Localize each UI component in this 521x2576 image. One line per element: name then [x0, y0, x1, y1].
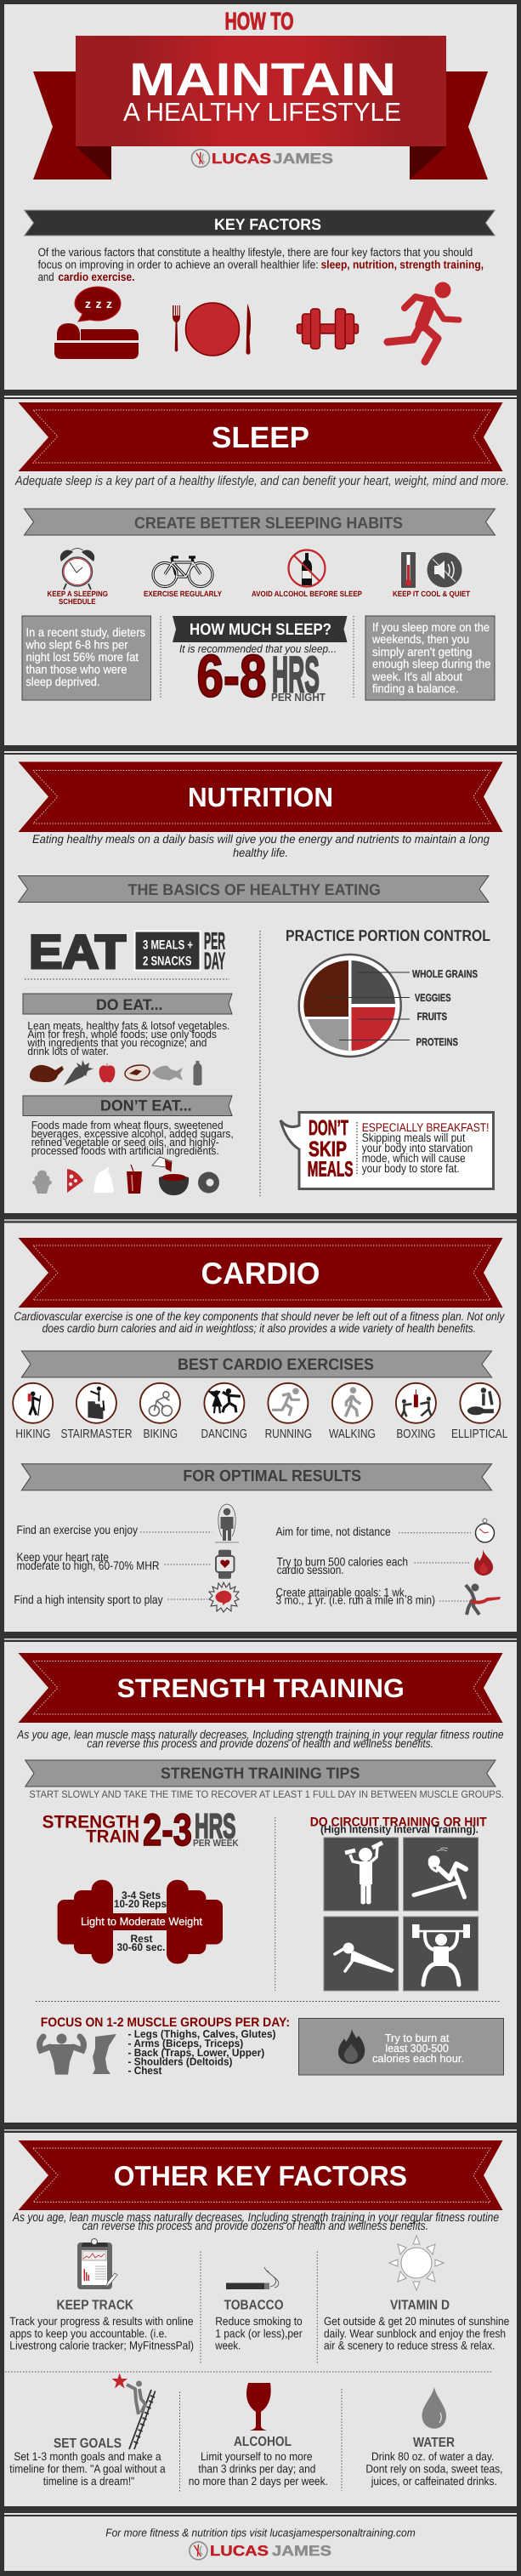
portion plate chart — [299, 955, 478, 1057]
label: keep a sleeping schedule — [48, 590, 108, 606]
callout: study: who slept 6-8 hrs per — [25, 638, 128, 652]
callout: burn calories: least 300-500 — [386, 2042, 449, 2055]
stat: strength train 2-3 hrs: TRAIN — [86, 1827, 139, 1847]
icon: thermometer — [401, 552, 416, 588]
do eat text — [26, 1019, 229, 1057]
factor: water: Dont rely on soda, sweet teas, — [365, 2463, 503, 2476]
icon: dumbbell — [297, 309, 359, 349]
callout: weekends: week. It's all about — [371, 670, 462, 683]
icon: goal climber — [112, 2374, 156, 2449]
factor: keep track: KEEP TRACK — [56, 2299, 133, 2312]
factor: set goals — [9, 2436, 166, 2488]
factor: water: Drink 80 oz. of water a day. — [371, 2450, 494, 2463]
tip: attainable goals: 3 mo., 1 yr. (i.e. run a mile in 8 min) — [275, 1593, 435, 1607]
tip: time not distance — [275, 1519, 495, 1542]
icon: walking — [332, 1383, 372, 1423]
factor: alcohol: no more than 2 days per week. — [189, 2475, 328, 2488]
panel: cardio — [4, 1223, 517, 1632]
callout: don't skip meals: DON’T — [309, 1116, 348, 1140]
don't eat ribbon: DON’T EAT... — [100, 1097, 192, 1114]
factor: set goals: timeline is a dream!" — [43, 2475, 134, 2488]
panel: nutrition — [4, 755, 517, 1213]
intro text — [38, 246, 484, 283]
don't eat text: Foods made from wheat flours, sweetened — [31, 1119, 224, 1131]
heading: circuit training: (High Intensity Interval Training). — [320, 1824, 479, 1836]
icon: incline sit-up — [404, 1838, 479, 1911]
muscle group list: - Chest — [127, 2065, 162, 2077]
icon: dancing — [204, 1383, 244, 1423]
icon: muscle torso and leg — [40, 2033, 116, 2075]
intro text: can reverse this process and provide dozens of health and wellness benefits. — [87, 1736, 433, 1750]
callout: don't skip meals: Skipping meals will put — [362, 1131, 465, 1144]
panel: footer — [4, 2516, 517, 2571]
label: keep it cool and quiet: KEEP IT COOL & QUIET — [393, 590, 470, 598]
callout: weekends — [365, 616, 495, 700]
do eat ribbon: DO EAT... — [96, 996, 163, 1013]
eat headline: 2 SNACKS — [143, 955, 192, 968]
icon: sleeping in bed: z z z — [85, 297, 112, 311]
icons: unhealthy foods — [32, 1157, 219, 1195]
subheading ribbon: THE BASICS OF HEALTHY EATING — [127, 881, 381, 898]
intro text: and — [38, 271, 54, 283]
how much sleep panel: PER NIGHT — [271, 691, 326, 704]
icon: boxing — [396, 1383, 436, 1423]
subheading ribbon — [21, 1351, 492, 1377]
icon: runner — [388, 282, 459, 362]
label: biking: BIKING — [143, 1428, 178, 1441]
factor: alcohol: than 3 drinks per day; and — [198, 2463, 315, 2476]
factor: vitamin d: air & scenery to reduce stress & relax. — [324, 2339, 495, 2352]
panel: nutrition: PER — [204, 927, 225, 955]
label: veggies: VEGGIES — [415, 992, 450, 1004]
icon: stairmaster — [76, 1383, 116, 1423]
callout: don't skip meals: your body to store fat. — [362, 1161, 460, 1175]
icon: wine glass — [246, 2383, 271, 2431]
tip: burn calories: Try to burn 500 calories each — [277, 1555, 408, 1569]
heading: circuit training: DO CIRCUIT TRAINING OR HIIT — [310, 1815, 487, 1830]
label: walking: WALKING — [329, 1428, 376, 1441]
do eat text: Lean meats, healthy fats & lotsof vegetables. — [27, 1019, 229, 1032]
logo: lucas james: JAMES — [273, 151, 333, 167]
muscle group list: - Back (Traps, Lower, Upper) — [127, 2047, 264, 2059]
don't eat text: beverages, excessive alcohol, added sugars, — [31, 1127, 234, 1140]
eat headline: EAT — [29, 925, 126, 978]
icon: plate and cutlery — [173, 303, 251, 356]
banner: other key factors: OTHER KEY FACTORS — [114, 2160, 407, 2191]
intro text — [16, 1728, 504, 1750]
do eat text: Aim for fresh, whole foods; use only foods — [27, 1028, 217, 1040]
how much sleep panel — [173, 616, 347, 710]
icon: muted speaker — [427, 553, 462, 587]
callout: study: sleep deprived. — [25, 675, 100, 688]
dumbbell diagram: 3-4 Sets — [122, 1889, 161, 1901]
do eat text: drink lots of water. — [27, 1045, 109, 1057]
factor: keep track: apps to keep you accountable. (i.e. — [9, 2328, 167, 2339]
icon: clipboard — [77, 2239, 117, 2289]
stat: strength train 2-3 hrs: 2-3 — [143, 1805, 192, 1855]
callout: study: night lost 56% more fat — [25, 650, 139, 664]
tip: attainable goals — [275, 1584, 501, 1615]
dumbbell diagram: Rest — [131, 1933, 153, 1945]
icon: sleeping in bed — [54, 287, 139, 359]
factor: keep track — [9, 2299, 194, 2352]
panel: other key factors — [4, 2133, 517, 2506]
muscle group list: - Legs (Thighs, Calves, Glutes) — [127, 2028, 275, 2040]
title: maintain: MAINTAIN — [129, 54, 396, 105]
logo: lucas james — [192, 150, 333, 167]
callout: weekends: weekends, then you — [371, 632, 469, 646]
icon: dumbbell press — [324, 1838, 399, 1911]
muscle group list: - Shoulders (Deltoids) — [127, 2055, 233, 2067]
banner: strength training — [19, 1653, 503, 1723]
don't eat ribbon — [23, 1096, 232, 1116]
factor: water — [365, 2436, 503, 2488]
icon: no alcohol — [289, 550, 325, 587]
logo: lucas james: JAMES — [272, 2543, 331, 2559]
factor: tobacco: week. — [214, 2339, 241, 2352]
dumbbell diagram: 10-20 Reps — [114, 1898, 167, 1910]
how much sleep panel: It is recommended that you sleep... — [179, 642, 337, 655]
intro text — [32, 832, 490, 859]
dumbbell diagram: Light to Moderate Weight — [81, 1915, 202, 1928]
label: fruits: FRUITS — [417, 1011, 447, 1023]
tip: heart rate — [17, 1550, 235, 1579]
tip: exercise you enjoy — [17, 1504, 239, 1542]
subheading ribbon — [21, 1464, 492, 1490]
icon: biking — [140, 1383, 180, 1423]
intro text — [12, 2211, 499, 2233]
how much sleep panel: HOW MUCH SLEEP? — [190, 621, 331, 639]
banner: sleep — [19, 402, 503, 471]
icons: healthy foods — [30, 1060, 202, 1086]
heading: portion control: PRACTICE PORTION CONTROL — [286, 926, 490, 944]
stat: strength train 2-3 hrs — [42, 1805, 239, 1855]
label: whole grains: WHOLE GRAINS — [412, 968, 478, 980]
factor: set goals: Set 1-3 month goals and make a — [14, 2450, 161, 2463]
factor: water: juices, or caffeinated drinks. — [371, 2475, 497, 2488]
heading ribbon: key factors — [24, 210, 495, 236]
banner: sleep: SLEEP — [212, 421, 309, 454]
factor: water: WATER — [413, 2436, 455, 2450]
intro text: cardio exercise. — [58, 271, 134, 283]
eat headline: 3 MEALS + — [143, 938, 193, 953]
subheading ribbon: STRENGTH TRAINING TIPS — [161, 1764, 360, 1782]
callout: study: In a recent study, dieters — [25, 625, 145, 639]
callout: don't skip meals — [280, 1113, 493, 1189]
logo: lucas james — [190, 2542, 331, 2560]
callout: weekends: If you sleep more on the — [372, 620, 490, 634]
factor: tobacco: TOBACCO — [224, 2299, 284, 2312]
banner: other key factors — [19, 2140, 503, 2210]
banner: nutrition: NUTRITION — [188, 782, 333, 812]
icon: cigarette — [226, 2267, 279, 2289]
callout: weekends: enough sleep during the — [372, 657, 491, 670]
panel: header and key factors — [4, 4, 517, 390]
intro text: can reverse this process and provide dozens of health and wellness benefits. — [82, 2220, 428, 2233]
tip: heart rate: Keep your heart rate — [17, 1550, 109, 1564]
intro text: healthy life. — [233, 846, 288, 859]
panel: nutrition: DAY — [204, 948, 225, 974]
tip: burn calories — [277, 1549, 493, 1576]
muscle group list — [127, 2028, 275, 2077]
icon: hiking — [13, 1383, 53, 1423]
factor: keep track: Livestrong calorie tracker; MyFitnessPal) — [9, 2339, 194, 2352]
callout: burn calories — [299, 2018, 503, 2075]
muscle group list: - Arms (Biceps, Triceps) — [127, 2037, 243, 2049]
callout: don't skip meals: your body into starvation — [362, 1141, 473, 1154]
factor: set goals: timeline for them. "A goal without a — [9, 2463, 166, 2476]
factor: set goals: SET GOALS — [54, 2436, 122, 2451]
subtitle: A HEALTHY LIFESTYLE — [123, 98, 401, 127]
subheading ribbon: CREATE BETTER SLEEPING HABITS — [134, 515, 403, 533]
intro text: sleep, nutrition, strength training, — [321, 259, 484, 271]
icon: push-up — [324, 1917, 399, 1991]
factor: keep track: Track your progress & results with online — [9, 2315, 193, 2328]
subheading ribbon: BEST CARDIO EXERCISES — [178, 1356, 374, 1374]
icon: bicycle — [153, 557, 212, 587]
label: exercise regularly: EXERCISE REGULARLY — [144, 590, 222, 598]
intro text: focus on improving in order to achieve an overall healthier life: — [38, 259, 319, 271]
callout: don't skip meals: SKIP — [309, 1137, 347, 1161]
do eat ribbon — [23, 994, 232, 1014]
don't eat text — [31, 1119, 234, 1157]
label: dancing: DANCING — [201, 1428, 247, 1441]
callout: don't skip meals: MEALS — [308, 1157, 354, 1181]
banner: cardio: CARDIO — [201, 1256, 320, 1291]
callout: study: than those who were — [25, 662, 127, 675]
subheading ribbon — [24, 509, 495, 535]
footer text: For more fitness & nutrition tips visit lucasjamespersonaltraining.com — [105, 2527, 416, 2539]
dumbbell diagram — [58, 1880, 223, 1963]
intro text: Eating healthy meals on a daily basis will give you the energy and nutrients to maintain a long — [32, 832, 490, 846]
tip: high intensity sport: Find a high intensity sport to play — [14, 1593, 163, 1606]
stat: strength train 2-3 hrs: STRENGTH — [42, 1812, 139, 1832]
logo: lucas james: LUCAS — [212, 151, 271, 167]
how much sleep panel: HRS — [272, 647, 320, 703]
callout: don't skip meals: ESPECIALLY BREAKFAST! — [362, 1120, 490, 1134]
tip: high intensity sport — [14, 1582, 239, 1612]
factor: alcohol: ALCOHOL — [234, 2435, 292, 2449]
label: stairmaster: STAIRMASTER — [61, 1428, 133, 1441]
panel: sleep — [4, 399, 517, 745]
factor: alcohol: Limit yourself to no more — [201, 2450, 313, 2463]
heading: how to: HOW TO — [224, 9, 294, 36]
subheading ribbon — [25, 1760, 496, 1787]
stat: strength train 2-3 hrs: PER WEEK — [193, 1838, 239, 1849]
tip: time not distance: Aim for time, not distance — [275, 1525, 391, 1538]
intro text: Of the various factors that constitute a healthy lifestyle, there are four key factors that you should — [38, 246, 473, 259]
callout: weekends: finding a balance. — [372, 681, 459, 695]
label: keep a sleeping schedule: SCHEDULE — [59, 597, 96, 606]
panel: strength training — [4, 1642, 517, 2123]
callout: burn calories: Try to burn at — [385, 2032, 450, 2044]
banner: strength training: STRENGTH TRAINING — [117, 1673, 405, 1703]
heading: circuit training — [310, 1815, 487, 1836]
callout: burn calories: calories each hour. — [372, 2052, 464, 2065]
tip: exercise you enjoy: Find an exercise you enjoy — [17, 1523, 138, 1536]
icon: running — [268, 1383, 308, 1423]
factor: tobacco: 1 pack (or less),per — [215, 2328, 303, 2339]
heading: muscle groups: FOCUS ON 1-2 MUSCLE GROUPS PER DAY: — [41, 2015, 290, 2030]
label: boxing: BOXING — [396, 1428, 435, 1441]
factor: tobacco: Reduce smoking to — [215, 2315, 303, 2328]
tip: burn calories: cardio session. — [277, 1563, 344, 1576]
factor: tobacco — [214, 2299, 303, 2352]
factor: vitamin d: VITAMIN D — [390, 2299, 450, 2312]
icon: elliptical — [460, 1383, 500, 1423]
factor: alcohol — [189, 2435, 328, 2488]
factor: vitamin d — [324, 2299, 509, 2352]
label: running: RUNNING — [265, 1428, 312, 1441]
dumbbell diagram: 30-60 sec. — [117, 1941, 165, 1953]
title ribbon — [33, 36, 488, 180]
subheading ribbon — [19, 876, 489, 902]
icon: alarm clock — [60, 548, 94, 590]
banner: nutrition — [19, 762, 503, 832]
do eat text: with ingredients that you recognize; and — [26, 1036, 207, 1049]
label: keep a sleeping schedule: KEEP A SLEEPING — [48, 590, 108, 598]
heading ribbon: key factors: KEY FACTORS — [214, 215, 321, 233]
tip: attainable goals: Create attainable goals: 1 wk, — [275, 1586, 407, 1599]
icon: sun — [389, 2236, 444, 2290]
intro text — [14, 1309, 505, 1335]
label: proteins: PROTEINS — [416, 1036, 458, 1048]
banner: cardio — [19, 1238, 503, 1308]
don't eat text: refined vegetable or seed oils, and highly- — [31, 1136, 219, 1148]
label: elliptical: ELLIPTICAL — [451, 1428, 507, 1441]
tip: heart rate: moderate to high, 60-70% MHR — [17, 1559, 160, 1572]
logo: lucas james: LUCAS — [210, 2543, 269, 2559]
icon: water drop — [422, 2387, 446, 2429]
subheading ribbon: FOR OPTIMAL RESULTS — [183, 1468, 361, 1485]
label: avoid alcohol before sleep: AVOID ALCOHOL BEFORE SLEEP — [252, 590, 362, 598]
how much sleep panel: 6-8 — [197, 643, 267, 710]
label: hiking: HIKING — [15, 1428, 50, 1441]
callout: don't skip meals: mode, which will cause — [362, 1151, 466, 1165]
stat: strength train 2-3 hrs: HRS — [195, 1807, 236, 1846]
callout: study — [22, 616, 151, 700]
don't eat text: processed foods with artificial ingredients. — [31, 1144, 219, 1157]
icon: overhead press — [404, 1917, 479, 1991]
callout: weekends: simply aren't getting — [372, 645, 473, 658]
eat headline — [29, 925, 225, 978]
